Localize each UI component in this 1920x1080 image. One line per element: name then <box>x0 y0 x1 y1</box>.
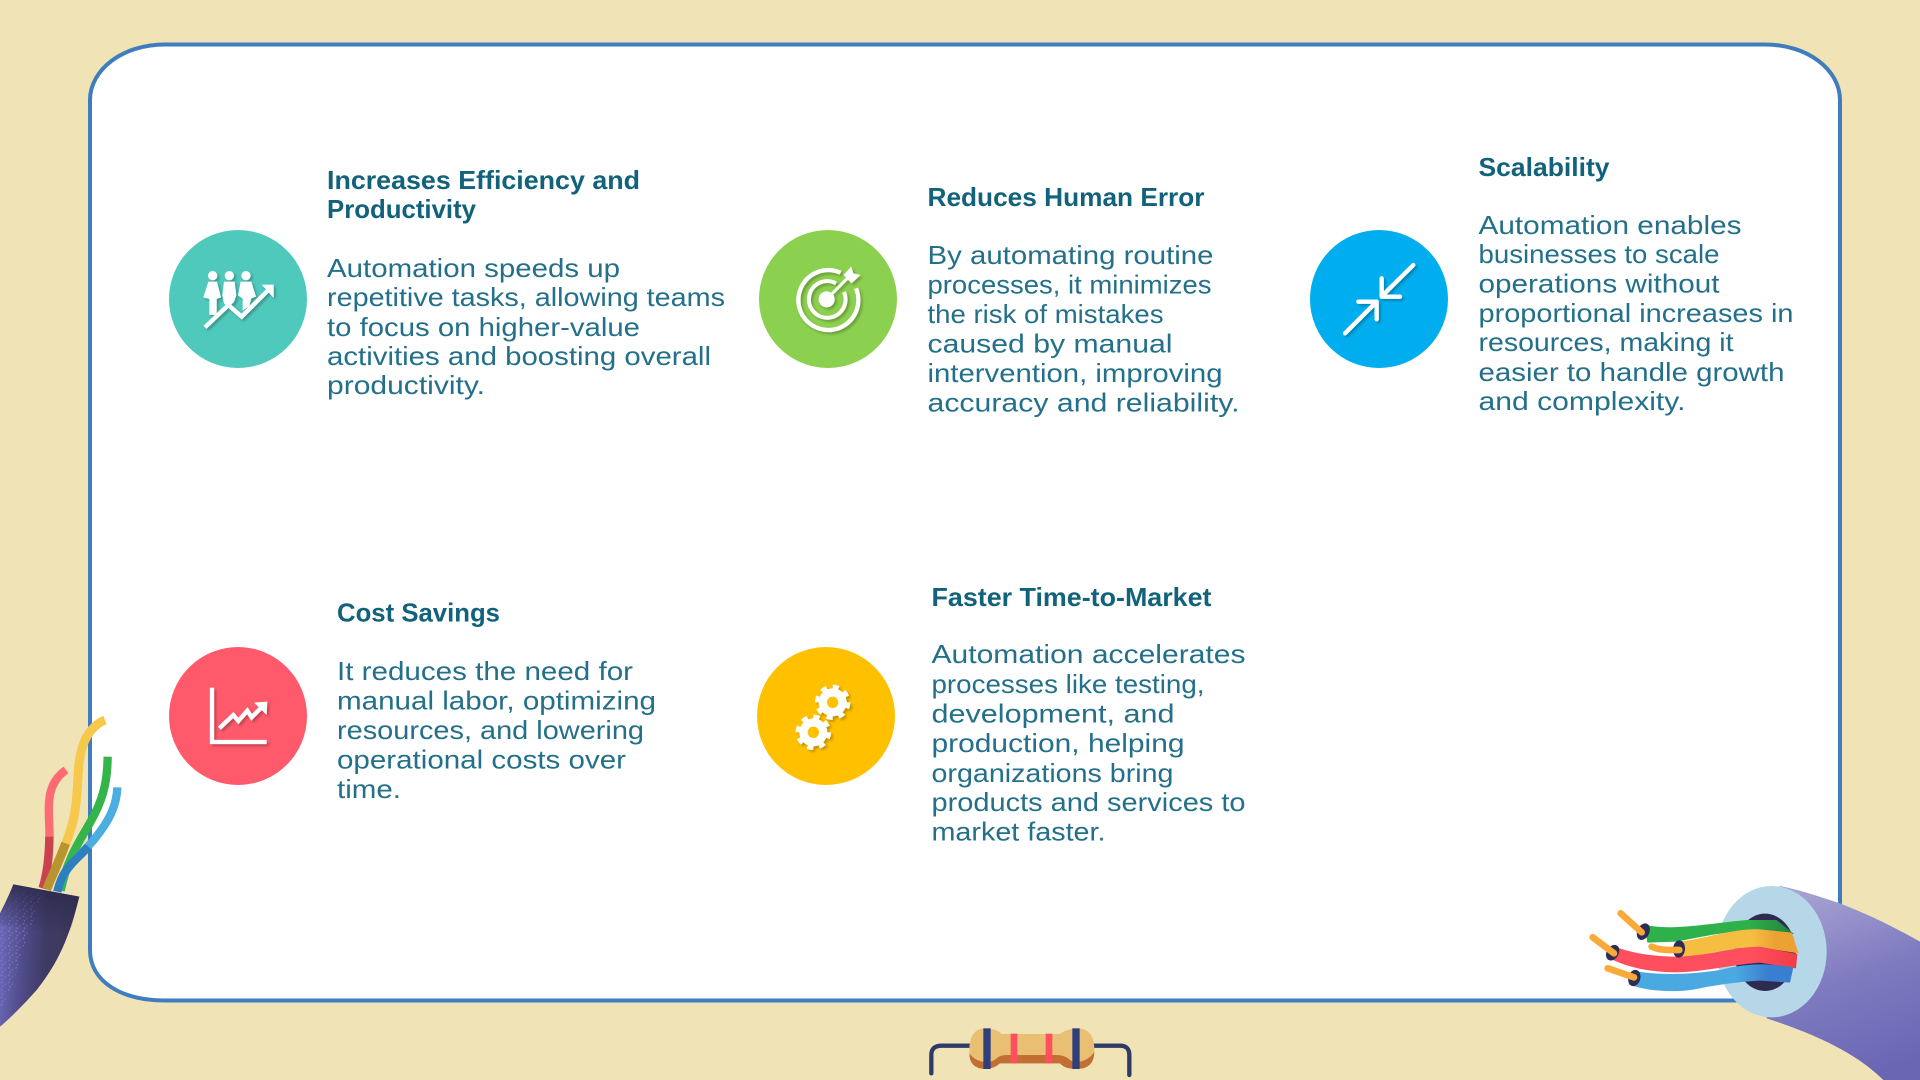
card: cost savings <box>169 598 656 804</box>
icon: target with arrow <box>759 230 897 368</box>
text: scalability body: and complexity. <box>1478 386 1686 416</box>
text: faster time-to-market body: products and services to <box>932 787 1246 817</box>
icon: converging arrows <box>1310 230 1448 368</box>
icon: gears <box>757 647 895 785</box>
text: reduces human error body: processes, it minimizes <box>928 270 1212 300</box>
text: scalability body: proportional increases in <box>1478 298 1794 328</box>
text: scalability body: resources, making it <box>1478 327 1734 357</box>
wire shading: lower section <box>43 837 88 892</box>
text: faster time-to-market body: Automation accelerates <box>932 639 1246 669</box>
text: scalability body: businesses to scale <box>1478 239 1720 269</box>
heading: scalability: Scalability <box>1478 152 1610 182</box>
icon: line chart <box>169 647 307 785</box>
heading: increases efficiency: Productivity <box>327 194 477 224</box>
text: scalability body: easier to handle growth <box>1478 357 1784 387</box>
tube ring <box>1717 886 1827 1017</box>
text: scalability body <box>1478 210 1794 416</box>
text: cost savings body: manual labor, optimizing <box>337 686 656 716</box>
text: faster time-to-market body: development, and <box>932 698 1174 728</box>
cable tube <box>1767 886 1920 1080</box>
illustration: right cable with wires <box>1593 886 1920 1080</box>
text: cost savings body: resources, and lowering <box>337 715 644 745</box>
text: faster time-to-market body <box>932 639 1246 846</box>
text: reduces human error body: caused by manual <box>928 328 1172 358</box>
tube hole <box>1734 914 1796 991</box>
wire: yellow <box>47 720 105 889</box>
text: reduces human error body: the risk of mistakes <box>928 299 1164 329</box>
icon: people with rising arrow <box>169 230 307 368</box>
wire caps <box>1603 921 1686 988</box>
text: cost savings body: time. <box>337 774 401 804</box>
text: reduces human error body: By automating routine <box>928 240 1214 270</box>
text: faster time-to-market body: organizations bring <box>932 758 1174 788</box>
text: scalability body: operations without <box>1478 268 1720 298</box>
text: increases efficiency body: activities and boosting overall <box>327 341 711 371</box>
wire: blue <box>1628 964 1793 991</box>
wire: red <box>1612 947 1797 972</box>
text: reduces human error body: accuracy and reliability. <box>928 388 1240 418</box>
text: cost savings body: It reduces the need for <box>337 656 633 686</box>
wire tips: copper ends <box>1593 913 1679 977</box>
text: increases efficiency body: Automation speeds up <box>327 253 620 283</box>
wire: green <box>61 757 108 891</box>
heading: increases efficiency <box>327 165 640 224</box>
resistor leads <box>931 1046 1129 1075</box>
text: increases efficiency body <box>327 253 725 400</box>
text: increases efficiency body: to focus on higher-value <box>327 312 640 342</box>
text: increases efficiency body: repetitive tasks, allowing teams <box>327 282 725 312</box>
text: faster time-to-market body: production, helping <box>932 728 1184 758</box>
card: scalability <box>1310 152 1794 416</box>
text: reduces human error body: intervention, improving <box>928 358 1222 388</box>
cable sheath <box>0 884 79 1027</box>
resistor body <box>969 1028 1094 1069</box>
heading: increases efficiency: Increases Efficiency and <box>327 165 640 195</box>
text: faster time-to-market body: processes like testing, <box>932 669 1204 699</box>
wire: green <box>1645 920 1794 943</box>
illustration: left cable with wires <box>0 720 117 1027</box>
text: cost savings body <box>337 656 656 804</box>
heading: faster time-to-market: Faster Time-to-Market <box>932 582 1212 612</box>
wire: blue <box>57 787 117 892</box>
heading: cost savings: Cost Savings <box>337 598 500 628</box>
illustration: resistor <box>931 1028 1129 1075</box>
heading: reduces human error: Reduces Human Error <box>928 182 1204 212</box>
text: reduces human error body <box>928 240 1240 418</box>
card: increases efficiency <box>169 165 725 400</box>
text: cost savings body: operational costs over <box>337 744 626 774</box>
text: increases efficiency body: productivity. <box>327 370 485 400</box>
card: reduces human error <box>759 182 1240 418</box>
wire: yellow <box>1680 929 1799 957</box>
wire: red <box>43 770 66 888</box>
card: faster time-to-market <box>757 582 1246 846</box>
text: faster time-to-market body: market faster. <box>932 816 1106 846</box>
text: scalability body: Automation enables <box>1478 210 1742 240</box>
